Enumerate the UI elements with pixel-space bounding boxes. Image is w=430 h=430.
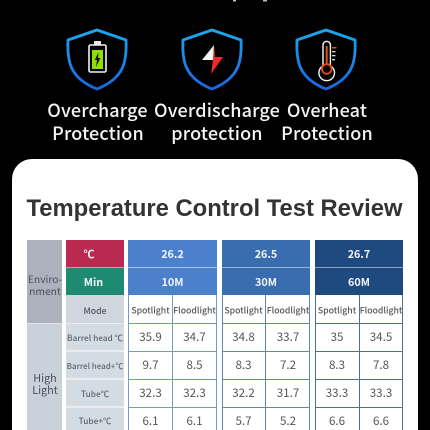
column group: 10 minutes: Spotlight bbox=[131, 304, 170, 316]
column group: 60 minutes: 33.3 bbox=[370, 385, 392, 401]
column group: 30 minutes: 5.2 bbox=[280, 413, 296, 429]
column group: 60 minutes: 7.8 bbox=[373, 357, 389, 373]
column group: 30 minutes: 8.3 bbox=[235, 357, 252, 373]
row header: high light: Light bbox=[32, 382, 58, 398]
column group: 30 minutes: Floodlight bbox=[267, 304, 310, 316]
mode label cell bbox=[66, 295, 124, 323]
column group: 60 minutes bbox=[315, 240, 403, 430]
icon: overheat shield with thermometer bbox=[297, 30, 355, 89]
column group: 10 minutes: 32.3 bbox=[183, 385, 206, 401]
label: overheat protection: Overheat bbox=[287, 97, 367, 123]
column group: 60 minutes: 8.3 bbox=[329, 357, 345, 373]
row header: environment bbox=[27, 240, 63, 323]
minutes header cell: Min bbox=[84, 274, 103, 290]
column group: 10 minutes: 6.1 bbox=[142, 413, 159, 429]
column group: 60 minutes: 33.3 bbox=[326, 385, 348, 401]
column group: 10 minutes: 32.3 bbox=[139, 385, 162, 401]
column group: 10 minutes: Floodlight bbox=[173, 304, 216, 316]
column group: 60 minutes: 6.6 bbox=[329, 413, 345, 429]
label: overheat protection: Protection bbox=[281, 120, 373, 146]
metric labels: Tube+℃ bbox=[79, 415, 112, 427]
label: overdischarge protection bbox=[154, 97, 280, 146]
minutes header cell bbox=[66, 268, 124, 295]
column group: 60 minutes: 6.6 bbox=[373, 413, 389, 429]
table bbox=[27, 240, 403, 430]
title: Temperature Control Test Review bbox=[26, 195, 403, 222]
icon: overcharge shield with battery bbox=[68, 30, 126, 89]
row header: high light bbox=[27, 324, 62, 430]
column group: 30 minutes: 33.7 bbox=[277, 329, 299, 345]
column group: 10 minutes: 6.1 bbox=[186, 413, 203, 429]
metric labels: Barrel head ℃ bbox=[67, 332, 124, 344]
temperature header cell: ℃ bbox=[84, 246, 95, 262]
label: overcharge protection bbox=[47, 97, 148, 146]
column group: 10 minutes: 9.7 bbox=[142, 357, 159, 373]
column group: 30 minutes: Spotlight bbox=[224, 304, 263, 316]
column group: 60 minutes: Floodlight bbox=[360, 304, 403, 316]
column group: 60 minutes: 35 bbox=[331, 329, 343, 345]
row header: high light: High bbox=[33, 370, 57, 386]
column group: 30 minutes: 26.5 bbox=[255, 246, 277, 262]
column group: 10 minutes: 35.9 bbox=[139, 329, 162, 345]
column group: 10 minutes bbox=[128, 240, 217, 430]
temperature header cell bbox=[66, 240, 124, 268]
column group: 60 minutes: 26.7 bbox=[348, 246, 370, 262]
metric labels: Tube℃ bbox=[81, 388, 110, 400]
metric labels bbox=[66, 324, 124, 430]
label: overdischarge protection: Overdischarge bbox=[154, 97, 280, 123]
column group: 10 minutes: 8.5 bbox=[186, 357, 203, 373]
clipped text remnants at top edge bbox=[233, 0, 267, 2]
column group: 60 minutes: 34.5 bbox=[370, 329, 392, 345]
metric labels: Barrel head+℃ bbox=[67, 361, 123, 372]
row header: environment: Enviro- bbox=[28, 271, 63, 286]
column group: 30 minutes: 5.7 bbox=[235, 413, 252, 429]
mode label cell: Mode bbox=[84, 304, 107, 317]
label: overcharge protection: Overcharge bbox=[47, 97, 148, 123]
row header: environment: nment bbox=[29, 283, 61, 298]
column group: 30 minutes bbox=[222, 240, 310, 430]
column group: 10 minutes: 34.7 bbox=[183, 329, 206, 345]
column group: 10 minutes: 10M bbox=[162, 274, 183, 290]
icon: overdischarge shield with bolt bbox=[183, 30, 241, 89]
column group: 30 minutes: 7.2 bbox=[280, 357, 296, 373]
column group: 30 minutes: 34.8 bbox=[232, 329, 255, 345]
label: overheat protection bbox=[281, 97, 373, 146]
column group: 30 minutes: 32.2 bbox=[232, 385, 255, 401]
label: overcharge protection: Protection bbox=[52, 120, 144, 146]
column group: 30 minutes: 30M bbox=[255, 274, 277, 290]
panel: test review card bbox=[12, 159, 418, 430]
label: overdischarge protection: protection bbox=[171, 120, 263, 146]
column group: 60 minutes: 60M bbox=[348, 274, 370, 290]
column group: 30 minutes: 31.7 bbox=[277, 385, 299, 401]
column group: 60 minutes: Spotlight bbox=[318, 304, 357, 316]
column group: 10 minutes: 26.2 bbox=[161, 246, 184, 262]
